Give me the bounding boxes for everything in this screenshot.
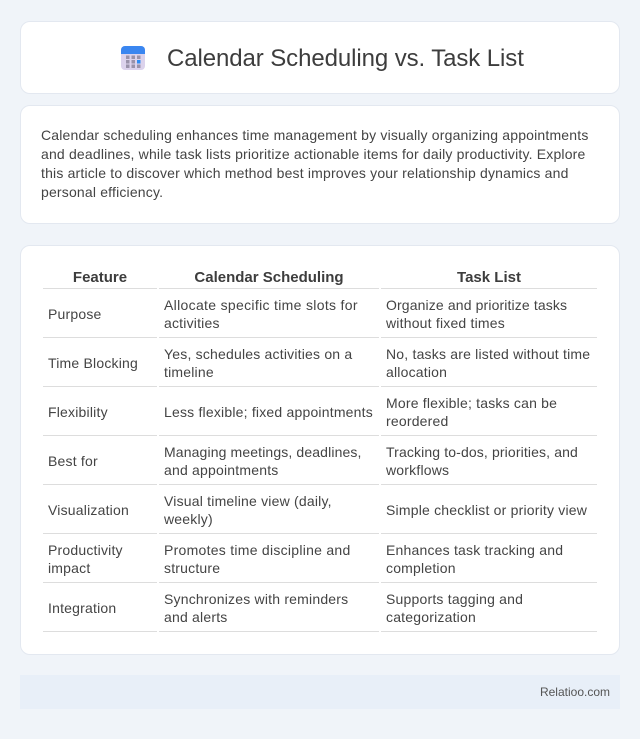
row: Time Blocking [43,346,597,387]
row: Visualization: Simple checklist or priority view [386,502,587,518]
row: Purpose: Purpose [48,306,102,322]
row: Integration [43,591,597,632]
row: Purpose [43,297,597,338]
row: Time Blocking: allocation [386,364,447,380]
row: Integration: categorization [386,609,476,625]
row: Productivity impact [43,542,597,583]
row: Purpose: Organize and prioritize tasks [386,297,567,313]
row: Time Blocking: Yes, schedules activities on a [164,346,352,362]
intro paragraph [41,127,588,200]
row: Purpose: Allocate specific time slots for [164,297,358,313]
row: Purpose: activities [164,315,220,331]
intro paragraph: and deadlines, while task lists prioritize actionable items for daily productivity. Explore [41,146,585,162]
row: Visualization: Visualization [48,502,129,518]
row: Productivity impact: structure [164,560,220,576]
row: Purpose: without fixed times [386,315,505,331]
row: Integration: Supports tagging and [386,591,523,607]
row: Flexibility: More flexible; tasks can be [386,395,557,411]
row: Productivity impact: Promotes time discipline and [164,542,351,558]
intro text panel [20,105,620,224]
table header: Calendar Scheduling [194,269,344,286]
intro paragraph: personal efficiency. [41,184,163,200]
row: Best for: Managing meetings, deadlines, [164,444,362,460]
row: Visualization: weekly) [164,511,213,527]
intro paragraph: Calendar scheduling enhances time management by visually organizing appointments [41,127,588,143]
row: Best for: Best for [48,453,98,469]
row: Best for [43,444,597,485]
icon: calendar [121,46,145,70]
row: Best for: and appointments [164,462,279,478]
row: Productivity impact: Enhances task tracking and [386,542,563,558]
row: Integration: Integration [48,600,116,616]
table header [43,269,597,289]
row: Integration: Synchronizes with reminders [164,591,348,607]
row: Time Blocking: Time Blocking [48,355,138,371]
row: Best for: Tracking to-dos, priorities, and [386,444,578,460]
row: Flexibility: reordered [386,413,449,429]
intro paragraph: this article to discover which method best improves your relationship dynamics and [41,165,569,181]
table header: Task List [457,269,521,286]
title card [20,21,620,94]
row: Productivity impact: impact [48,560,90,576]
row: Flexibility [43,395,597,436]
row: Productivity impact: Productivity [48,542,123,558]
row: Integration: and alerts [164,609,227,625]
row: Productivity impact: completion [386,560,456,576]
row: Flexibility: Flexibility [48,404,108,420]
row: Flexibility: Less flexible; fixed appointments [164,404,373,420]
row: Time Blocking: timeline [164,364,214,380]
title: Calendar Scheduling vs. Task List [167,45,524,72]
table header: Feature [73,269,127,286]
row: Visualization: Visual timeline view (daily, [164,493,332,509]
footer bar [20,675,620,709]
comparison table panel [20,245,620,655]
row: Visualization [43,493,597,534]
footer credit: Relatioo.com [540,685,610,699]
row: Time Blocking: No, tasks are listed without time [386,346,590,362]
row: Best for: workflows [386,462,449,478]
